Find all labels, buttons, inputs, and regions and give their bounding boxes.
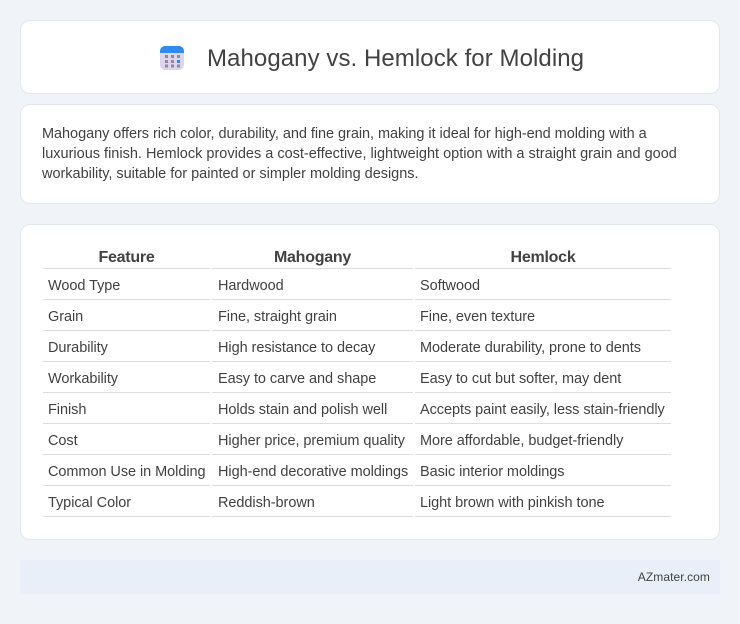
comparison table: Mahogany: [274, 249, 351, 266]
comparison table: More affordable, budget-friendly: [420, 433, 623, 449]
title card: [20, 20, 720, 94]
row: common use: [48, 464, 564, 480]
intro text: luxurious finish. Hemlock provides a cost-effective, lightweight option with a straight grain and good: [42, 146, 677, 162]
comparison table: Fine, straight grain: [218, 309, 337, 325]
comparison table: Hardwood: [218, 278, 284, 294]
comparison table: Easy to carve and shape: [218, 371, 376, 387]
comparison table: Cost: [48, 433, 78, 449]
intro text: workability, suitable for painted or simpler molding designs.: [42, 166, 418, 182]
comparison table: Reddish-brown: [218, 495, 315, 511]
row: durability: [48, 340, 641, 356]
comparison table: Higher price, premium quality: [218, 433, 405, 449]
row: cost: [48, 433, 624, 449]
icon: calendar: [160, 46, 184, 70]
row: workability: [48, 371, 622, 387]
intro text: Mahogany offers rich color, durability, and fine grain, making it ideal for high-end molding with a: [42, 126, 647, 142]
comparison table: Workability: [48, 371, 118, 387]
row: wood type: [48, 278, 480, 294]
comparison table: High resistance to decay: [218, 340, 375, 356]
comparison table: Grain: [48, 309, 83, 325]
comparison table: Fine, even texture: [420, 309, 535, 325]
comparison table: Basic interior moldings: [420, 464, 564, 480]
footer bar: [20, 560, 720, 594]
title: Mahogany vs. Hemlock for Molding: [207, 45, 584, 72]
comparison table: Common Use in Molding: [48, 464, 206, 480]
intro text: [42, 126, 677, 182]
comparison table: Holds stain and polish well: [218, 402, 387, 418]
comparison table: Wood Type: [48, 278, 120, 294]
comparison table: Moderate durability, prone to dents: [420, 340, 641, 356]
comparison table: Feature: [98, 249, 155, 266]
footer credit: AZmater.com: [638, 570, 710, 584]
row: typical color: [48, 495, 604, 511]
comparison table: Accepts paint easily, less stain-friendly: [420, 402, 665, 418]
row: grain: [48, 309, 535, 325]
comparison table: Easy to cut but softer, may dent: [420, 371, 621, 387]
comparison table: Finish: [48, 402, 86, 418]
table card: [20, 224, 720, 540]
row: finish: [48, 402, 665, 418]
comparison table: High-end decorative moldings: [218, 464, 408, 480]
comparison table: Softwood: [420, 278, 480, 294]
intro card: [20, 104, 720, 204]
comparison table: Light brown with pinkish tone: [420, 495, 604, 511]
comparison table: Durability: [48, 340, 108, 356]
comparison table: Typical Color: [48, 495, 131, 511]
table header: [98, 249, 576, 266]
comparison table: Hemlock: [511, 249, 575, 266]
